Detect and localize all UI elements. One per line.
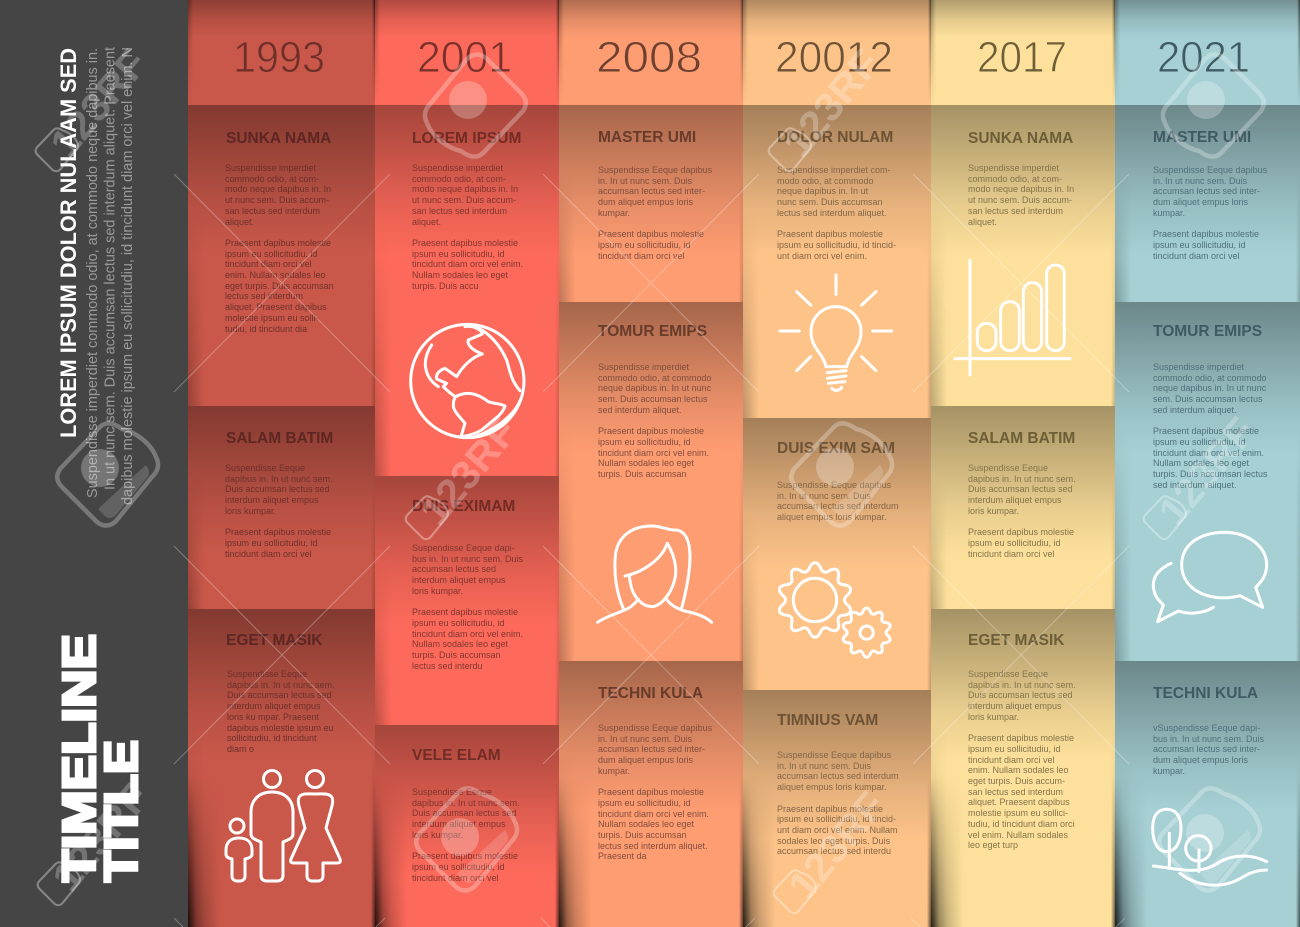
text block xyxy=(1153,165,1267,261)
text block: Suspendisse Eeque dapi- xyxy=(412,543,515,553)
text block xyxy=(598,723,712,861)
text block: Praesent dapibus molestie xyxy=(598,426,704,436)
text block: lectus sed interdum xyxy=(225,291,303,301)
year labels: 2008 xyxy=(596,33,702,82)
text block: Suspendisse imperdiet com- xyxy=(777,165,891,175)
text block xyxy=(598,165,712,261)
text block: tincidunt diam orci vel xyxy=(968,755,1055,765)
heading: DUIS EXIMAM xyxy=(412,498,515,515)
text block: tincidunt diam orci vel enim. xyxy=(1153,448,1264,458)
text block: aliquet. xyxy=(412,217,441,227)
heading: LOREM IPSUM xyxy=(412,130,521,147)
text block: enim. Nullam sodales leo xyxy=(968,765,1069,775)
text block: Suspendisse imperdiet xyxy=(1153,362,1244,372)
text block: ipsum eu sollicitudiu, id tincid- xyxy=(777,240,896,250)
column: 2021 xyxy=(1115,0,1300,927)
section: Master Umi xyxy=(1115,105,1300,302)
year band: 1993 xyxy=(188,0,375,105)
text block: san lectus sed interdum xyxy=(968,787,1063,797)
text block xyxy=(968,669,1076,850)
text block: leo eget turp xyxy=(968,840,1018,850)
text block xyxy=(225,463,333,559)
text block: Praesent dapibus molestie xyxy=(225,238,331,248)
text block: Nullam sodales leo eget xyxy=(412,270,508,280)
section: Lorem Ipsum xyxy=(375,105,559,476)
section: Master Umi xyxy=(559,105,743,302)
heading: SUNKA NAMA xyxy=(968,130,1073,147)
text block: Praesent dapibus molestie xyxy=(598,229,704,239)
text block: commodo odio, at commodo xyxy=(598,373,712,383)
text block: kumpar. xyxy=(598,766,630,776)
text block: Praesent dapibus molestie xyxy=(777,229,883,239)
text block: Nullam sodales leo eget xyxy=(598,819,694,829)
text block: loris kumpar. xyxy=(225,506,276,516)
text block: Suspendisse Eeque xyxy=(227,669,307,679)
text block: Praesent dapibus molestie xyxy=(598,787,704,797)
text block: loris kumpar. xyxy=(968,506,1019,516)
text block: Suspendisse imperdiet xyxy=(968,163,1059,173)
text block: aliquet. Praesent dapibus xyxy=(225,302,327,312)
year band: 2021 xyxy=(1115,0,1300,105)
text block: ipsum eu sollicitudiu, id xyxy=(1153,240,1246,250)
icon: trees and hills xyxy=(1153,809,1267,885)
section: Timnius Vam xyxy=(743,690,931,927)
section: Duis Eximam xyxy=(375,476,559,725)
heading: DOLOR NULAM xyxy=(777,129,893,146)
text block: tincidunt diam orci vel enim. xyxy=(598,448,709,458)
text block: ipsum eu sollicitudiu, id xyxy=(225,538,318,548)
text block: Praesent dapibus molestie xyxy=(1153,426,1259,436)
text block: in. In ut nunc sem. Duis xyxy=(777,761,871,771)
text block: aliquet. Praesent dapibus xyxy=(968,797,1070,807)
text block: in. In ut nunc sem. Duis xyxy=(777,491,871,501)
text block: Praesent dapibus molestie xyxy=(412,238,518,248)
text block: sed interdum aliquet. xyxy=(1153,480,1237,490)
watermark: small stamps with 123RF: 123RF xyxy=(42,42,156,166)
text block: ipsum eu sollicitudiu, id xyxy=(968,744,1061,754)
text block: interdum aliquet empus xyxy=(225,495,319,505)
year band: 2001 xyxy=(375,0,559,105)
section: Techni Kula xyxy=(1115,661,1300,927)
text block: ut nunc sem. Duis accum- xyxy=(225,195,329,205)
text block: kumpar. xyxy=(1153,208,1185,218)
text block: loris ku mpar. Praesent xyxy=(227,712,319,722)
text block: Praesent dapibus molestie xyxy=(412,851,518,861)
text block: sem. Duis accumsan lectus xyxy=(1153,394,1263,404)
text block: sollicitudiu, id tincidunt xyxy=(227,733,317,743)
text block: diam o xyxy=(227,744,254,754)
text block: eget turpis. Duis accumsan xyxy=(225,281,334,291)
text block: dum aliquet empus loris xyxy=(598,197,693,207)
text block: Praesent dapibus molestie xyxy=(225,527,331,537)
watermark: small stamps with 123RF: 123RF xyxy=(1150,410,1264,534)
text block: modo neque dapibus in. In xyxy=(225,184,331,194)
text block: turpis. Duis accu xyxy=(412,281,479,291)
heading: MASTER UMI xyxy=(598,129,696,146)
text block: lectus sed interdum aliquet. xyxy=(598,841,708,851)
column: 2001 xyxy=(375,0,559,927)
text block: interdum aliquet empus xyxy=(412,575,506,585)
text block: dum aliquet empus loris xyxy=(1153,755,1248,765)
watermark: small stamps with 123RF: 123RF xyxy=(775,42,889,166)
text block: eget turpis. Duis accum- xyxy=(968,776,1065,786)
text block: ipsum eu sollicitudiu, id xyxy=(1153,437,1246,447)
text block: Suspendisse Eeque dapibus xyxy=(777,480,891,490)
sidebar body text: dapibus molestie ipsum eu sollicitudiu, id tincidunt diam orci vel enim. N xyxy=(120,47,136,505)
section: Sunka Nama xyxy=(931,105,1115,406)
text block: ipsum eu sollicitudiu, id tincid- xyxy=(777,814,896,824)
section: Tomur Emips xyxy=(1115,302,1300,661)
text block: molestie ipsum eu sollici- xyxy=(968,808,1068,818)
section: Techni Kula xyxy=(559,661,743,927)
text block: interdum aliquet empus xyxy=(968,701,1062,711)
text block xyxy=(968,163,1074,227)
text block: Nullam sodales leo eget xyxy=(412,639,508,649)
text block: Duis accumsan lectus sed xyxy=(227,690,332,700)
text block: Suspendisse Eeque dapibus xyxy=(777,750,891,760)
text block: interdum aliquet empus xyxy=(968,495,1062,505)
text block: ut nunc sem. Duis accum- xyxy=(412,195,516,205)
text block: in. In ut nunc sem. Duis xyxy=(598,176,692,186)
text block: Suspendisse Eeque xyxy=(968,669,1048,679)
text block: dapibus molestie ipsum eu xyxy=(227,723,334,733)
text block: loris kumpar. xyxy=(968,712,1019,722)
watermark: small stamps with 123RF: 123RF xyxy=(412,410,526,534)
text block: commodo odio, at com- xyxy=(412,174,506,184)
text block: aliquet empus loris kumpar. xyxy=(777,782,887,792)
text block: kumpar. xyxy=(598,208,630,218)
text block: bus in. In ut nunc sem. Duis xyxy=(1153,734,1264,744)
text block: dapibus in. In ut nunc sem. xyxy=(968,680,1076,690)
text block: turpis. Duis accumsan xyxy=(412,650,501,660)
heading: VELE ELAM xyxy=(412,747,501,764)
text block: ipsum eu sollicitudiu, id xyxy=(412,618,505,628)
text block: Suspendisse imperdiet xyxy=(598,362,689,372)
heading: SALAM BATIM xyxy=(968,430,1075,447)
text block: Duis accumsan lectus sed xyxy=(968,484,1073,494)
text block: Praesent dapibus molestie xyxy=(1153,229,1259,239)
sidebar body text: Suspendisse imperdiet commodo odio, at commodo neque dapibus in. xyxy=(85,48,101,498)
text block: tudiu, id tincidunt dia xyxy=(225,324,307,334)
year band: 2017 xyxy=(931,0,1115,105)
year band: 20012 xyxy=(743,0,931,105)
icon: woman xyxy=(598,526,712,622)
text block: vel enim. Nullam sodales xyxy=(968,830,1068,840)
year labels: 2017 xyxy=(977,33,1067,82)
year labels: 2021 xyxy=(1157,33,1250,82)
text block: Suspendisse Eeque dapibus xyxy=(1153,165,1267,175)
text block xyxy=(777,750,899,856)
sidebar body text: In ut nunc sem. Duis accumsan lectus sed interdum aliquet. Praesent xyxy=(102,47,118,490)
text block: Suspendisse Eeque dapibus xyxy=(598,723,712,733)
heading: MASTER UMI xyxy=(1153,129,1251,146)
text block: aliquet. xyxy=(968,217,997,227)
text block: vSuspendisse Eeque dapi- xyxy=(1153,723,1260,733)
text block: aliquet. xyxy=(225,217,254,227)
text block xyxy=(1153,362,1268,490)
text block xyxy=(412,163,523,291)
section: Salam Batim xyxy=(188,406,375,609)
text block: neque dapibus in. In ut xyxy=(777,186,868,196)
text block: neque dapibus in. In ut nunc xyxy=(598,383,711,393)
text block: loris kumpar. xyxy=(412,586,463,596)
text block: tincidunt diam orci vel xyxy=(598,251,685,261)
text block: interdum aliquet empus xyxy=(412,819,506,829)
text block xyxy=(412,787,520,883)
text block xyxy=(598,362,712,479)
text block: sed interdum aliquet. xyxy=(598,405,682,415)
text block: dum aliquet empus loris xyxy=(598,755,693,765)
text block: tincidunt diam orci vel xyxy=(225,259,312,269)
text block: ipsum eu sollicitudiu, id xyxy=(225,249,318,259)
section: Dolor Nulam xyxy=(743,105,931,418)
text block: unt diam orci vel enim. xyxy=(777,251,867,261)
heading: DUIS EXIM SAM xyxy=(777,440,895,457)
year band: 2008 xyxy=(559,0,743,105)
text block: tincidunt diam orci vel enim. xyxy=(598,809,709,819)
watermark: diagonal crosses xyxy=(174,174,1129,927)
text block: accumsan lectus sed inter- xyxy=(1153,186,1260,196)
text block: accumsan lectus sed interdu xyxy=(777,846,891,856)
watermark: small stamps with 123RF: 123RF xyxy=(44,776,158,900)
text block: san lectus sed interdum xyxy=(225,206,320,216)
text block: tincidunt diam orci vel xyxy=(225,549,312,559)
text block: sed interdum aliquet. xyxy=(1153,405,1237,415)
text block: Nullam sodales leo eget xyxy=(1153,458,1249,468)
icon: bar chart xyxy=(955,260,1070,375)
text block: Suspendisse imperdiet xyxy=(412,163,503,173)
text block xyxy=(968,463,1076,559)
text block: Suspendisse Eeque xyxy=(412,787,492,797)
text block: Praesent dapibus molestie xyxy=(777,804,883,814)
text block: Suspendisse imperdiet xyxy=(225,163,316,173)
year labels xyxy=(233,33,1250,82)
text block: Suspendisse Eeque xyxy=(968,463,1048,473)
text block: unt diam orci vel enim. Nullam xyxy=(777,825,898,835)
text block: ut nunc sem. Duis accum- xyxy=(968,195,1072,205)
heading: EGET MASIK xyxy=(226,632,322,649)
text block: sem. Duis accumsan lectus xyxy=(598,394,708,404)
text block: commodo odio, at commodo xyxy=(1153,373,1267,383)
section: Vele Elam xyxy=(375,725,559,927)
text block: in. In ut nunc sem. Duis xyxy=(598,734,692,744)
text block: lectus sed interdum aliquet. xyxy=(777,208,887,218)
text block: Suspendisse Eeque xyxy=(225,463,305,473)
text block: modo neque dapibus in. In xyxy=(412,184,518,194)
text block: accumsan lectus sed inter- xyxy=(598,744,705,754)
section: Duis Exim Sam xyxy=(743,418,931,690)
text block: ipsum eu sollicitudiu, id xyxy=(412,249,505,259)
heading: TECHNI KULA xyxy=(1153,685,1258,702)
text block: enim. Nullam sodales leo xyxy=(225,270,326,280)
heading: TOMUR EMIPS xyxy=(1153,323,1262,340)
text block: sodales leo eget turpis. Duis xyxy=(777,836,890,846)
icon: light bulb xyxy=(780,275,892,390)
text block: dapibus in. In ut nunc sem. xyxy=(225,474,333,484)
text block: accumsan lectus sed interdum xyxy=(777,501,899,511)
heading: TIMNIUS VAM xyxy=(777,712,878,729)
text block: kumpar. xyxy=(1153,766,1185,776)
section: Eget Masik xyxy=(188,609,375,927)
text block: neque dapibus in. In ut nunc xyxy=(1153,383,1266,393)
text block xyxy=(777,165,896,261)
year labels: 20012 xyxy=(775,33,893,82)
text block: accumsan lectus sed inter- xyxy=(598,186,705,196)
text block: bus in. In ut nunc sem. Duis xyxy=(412,554,523,564)
section: Eget Masik xyxy=(931,609,1115,927)
panel: dark title sidebar xyxy=(0,0,188,927)
column: 1993 xyxy=(188,0,375,927)
year labels: 1993 xyxy=(233,33,325,82)
section: Tomur Emips xyxy=(559,302,743,661)
text block: in. In ut nunc sem. Duis xyxy=(1153,176,1247,186)
heading: SUNKA NAMA xyxy=(226,130,331,147)
text block: Praesent dapibus molestie xyxy=(968,527,1074,537)
text block: turpis. Duis accumsan xyxy=(598,469,687,479)
text block: san lectus sed interdum xyxy=(412,206,507,216)
text block: aliquet empus loris kumpar. xyxy=(777,512,887,522)
text block: dapibus in. In ut nunc sem. xyxy=(412,798,520,808)
text block xyxy=(227,669,335,754)
heading: TOMUR EMIPS xyxy=(598,323,707,340)
section: Salam Batim xyxy=(931,406,1115,609)
column: 2017 xyxy=(931,0,1115,927)
text block: Duis accumsan lectus sed xyxy=(968,690,1073,700)
text block: ipsum eu sollicitudiu, id xyxy=(598,437,691,447)
column: 2008 xyxy=(559,0,743,927)
text block: tincidunt diam orci vel xyxy=(968,549,1055,559)
text block: modo neque dapibus in. In xyxy=(968,184,1074,194)
section: Sunka Nama xyxy=(188,105,375,406)
sidebar title: TIMELINE xyxy=(53,634,105,882)
text block xyxy=(777,480,899,522)
text block: ipsum eu sollicitudiu, id xyxy=(412,862,505,872)
text block xyxy=(225,163,334,334)
text block: ipsum eu sollicitudiu, id xyxy=(968,538,1061,548)
text block: lectus sed interdu xyxy=(412,661,483,671)
text block: accumsan lectus sed inter- xyxy=(1153,744,1260,754)
text block: dapibus in. In ut nunc sem. xyxy=(968,474,1076,484)
text block: tincidunt diam orci vel xyxy=(1153,251,1240,261)
text block: commodo odio, at com- xyxy=(225,174,319,184)
text block: ipsum eu sollicitudiu, id xyxy=(598,240,691,250)
icon: globe xyxy=(411,324,524,438)
text block: tudiu, id tincidunt diam orci xyxy=(968,819,1075,829)
text block: Praesent da xyxy=(598,851,647,861)
text block: Praesent dapibus molestie xyxy=(412,607,518,617)
text block: turpis. Duis accumsan lectus xyxy=(1153,469,1268,479)
text block: Duis accumsan lectus sed xyxy=(412,808,517,818)
text block: tincidunt diam orci vel enim. xyxy=(412,259,523,269)
sidebar title: TITLE xyxy=(95,740,147,882)
text block: Suspendisse Eeque dapibus xyxy=(598,165,712,175)
text block: dapibus in. In ut nunc sem. xyxy=(227,680,335,690)
text block: accumsan lectus sed xyxy=(412,564,496,574)
text block: commodo odio, at com- xyxy=(968,174,1062,184)
text block: loris kumpar. xyxy=(412,830,463,840)
text block: dum aliquet empus loris xyxy=(1153,197,1248,207)
sidebar title xyxy=(53,634,147,882)
icon: gears xyxy=(779,563,890,657)
text block xyxy=(412,543,523,671)
text block xyxy=(1153,723,1264,776)
watermark: small stamps with 123RF: 123RF xyxy=(780,784,894,908)
heading: EGET MASIK xyxy=(968,632,1064,649)
text block: Duis accumsan lectus sed xyxy=(225,484,330,494)
heading: TECHNI KULA xyxy=(598,685,703,702)
text block: modo odio, at commodo xyxy=(777,176,874,186)
sidebar body text xyxy=(85,47,136,505)
column: 20012 xyxy=(743,0,931,927)
text block: san lectus sed interdum xyxy=(968,206,1063,216)
text block: tincidunt diam orci vel enim. xyxy=(412,629,523,639)
text block: molestie ipsum eu solli- xyxy=(225,313,319,323)
year labels: 2001 xyxy=(417,33,512,82)
text block: ipsum eu sollicitudiu, id xyxy=(598,798,691,808)
text block: nunc sem. Duis accumsan xyxy=(777,197,883,207)
text block: accumsan lectus sed interdum xyxy=(777,771,899,781)
text block: tincidunt diam orci vel xyxy=(412,873,499,883)
icon: speech bubbles xyxy=(1153,532,1267,622)
heading: SALAM BATIM xyxy=(226,430,333,447)
icon: family xyxy=(226,770,340,881)
sidebar subtitle: LOREM IPSUM DOLOR NULAAM SED xyxy=(56,48,81,438)
text block: interdum aliquet empus xyxy=(227,701,321,711)
text block: Praesent dapibus molestie xyxy=(968,733,1074,743)
text block: Nullam sodales leo eget xyxy=(598,458,694,468)
text block: turpis. Duis accumsan xyxy=(598,830,687,840)
